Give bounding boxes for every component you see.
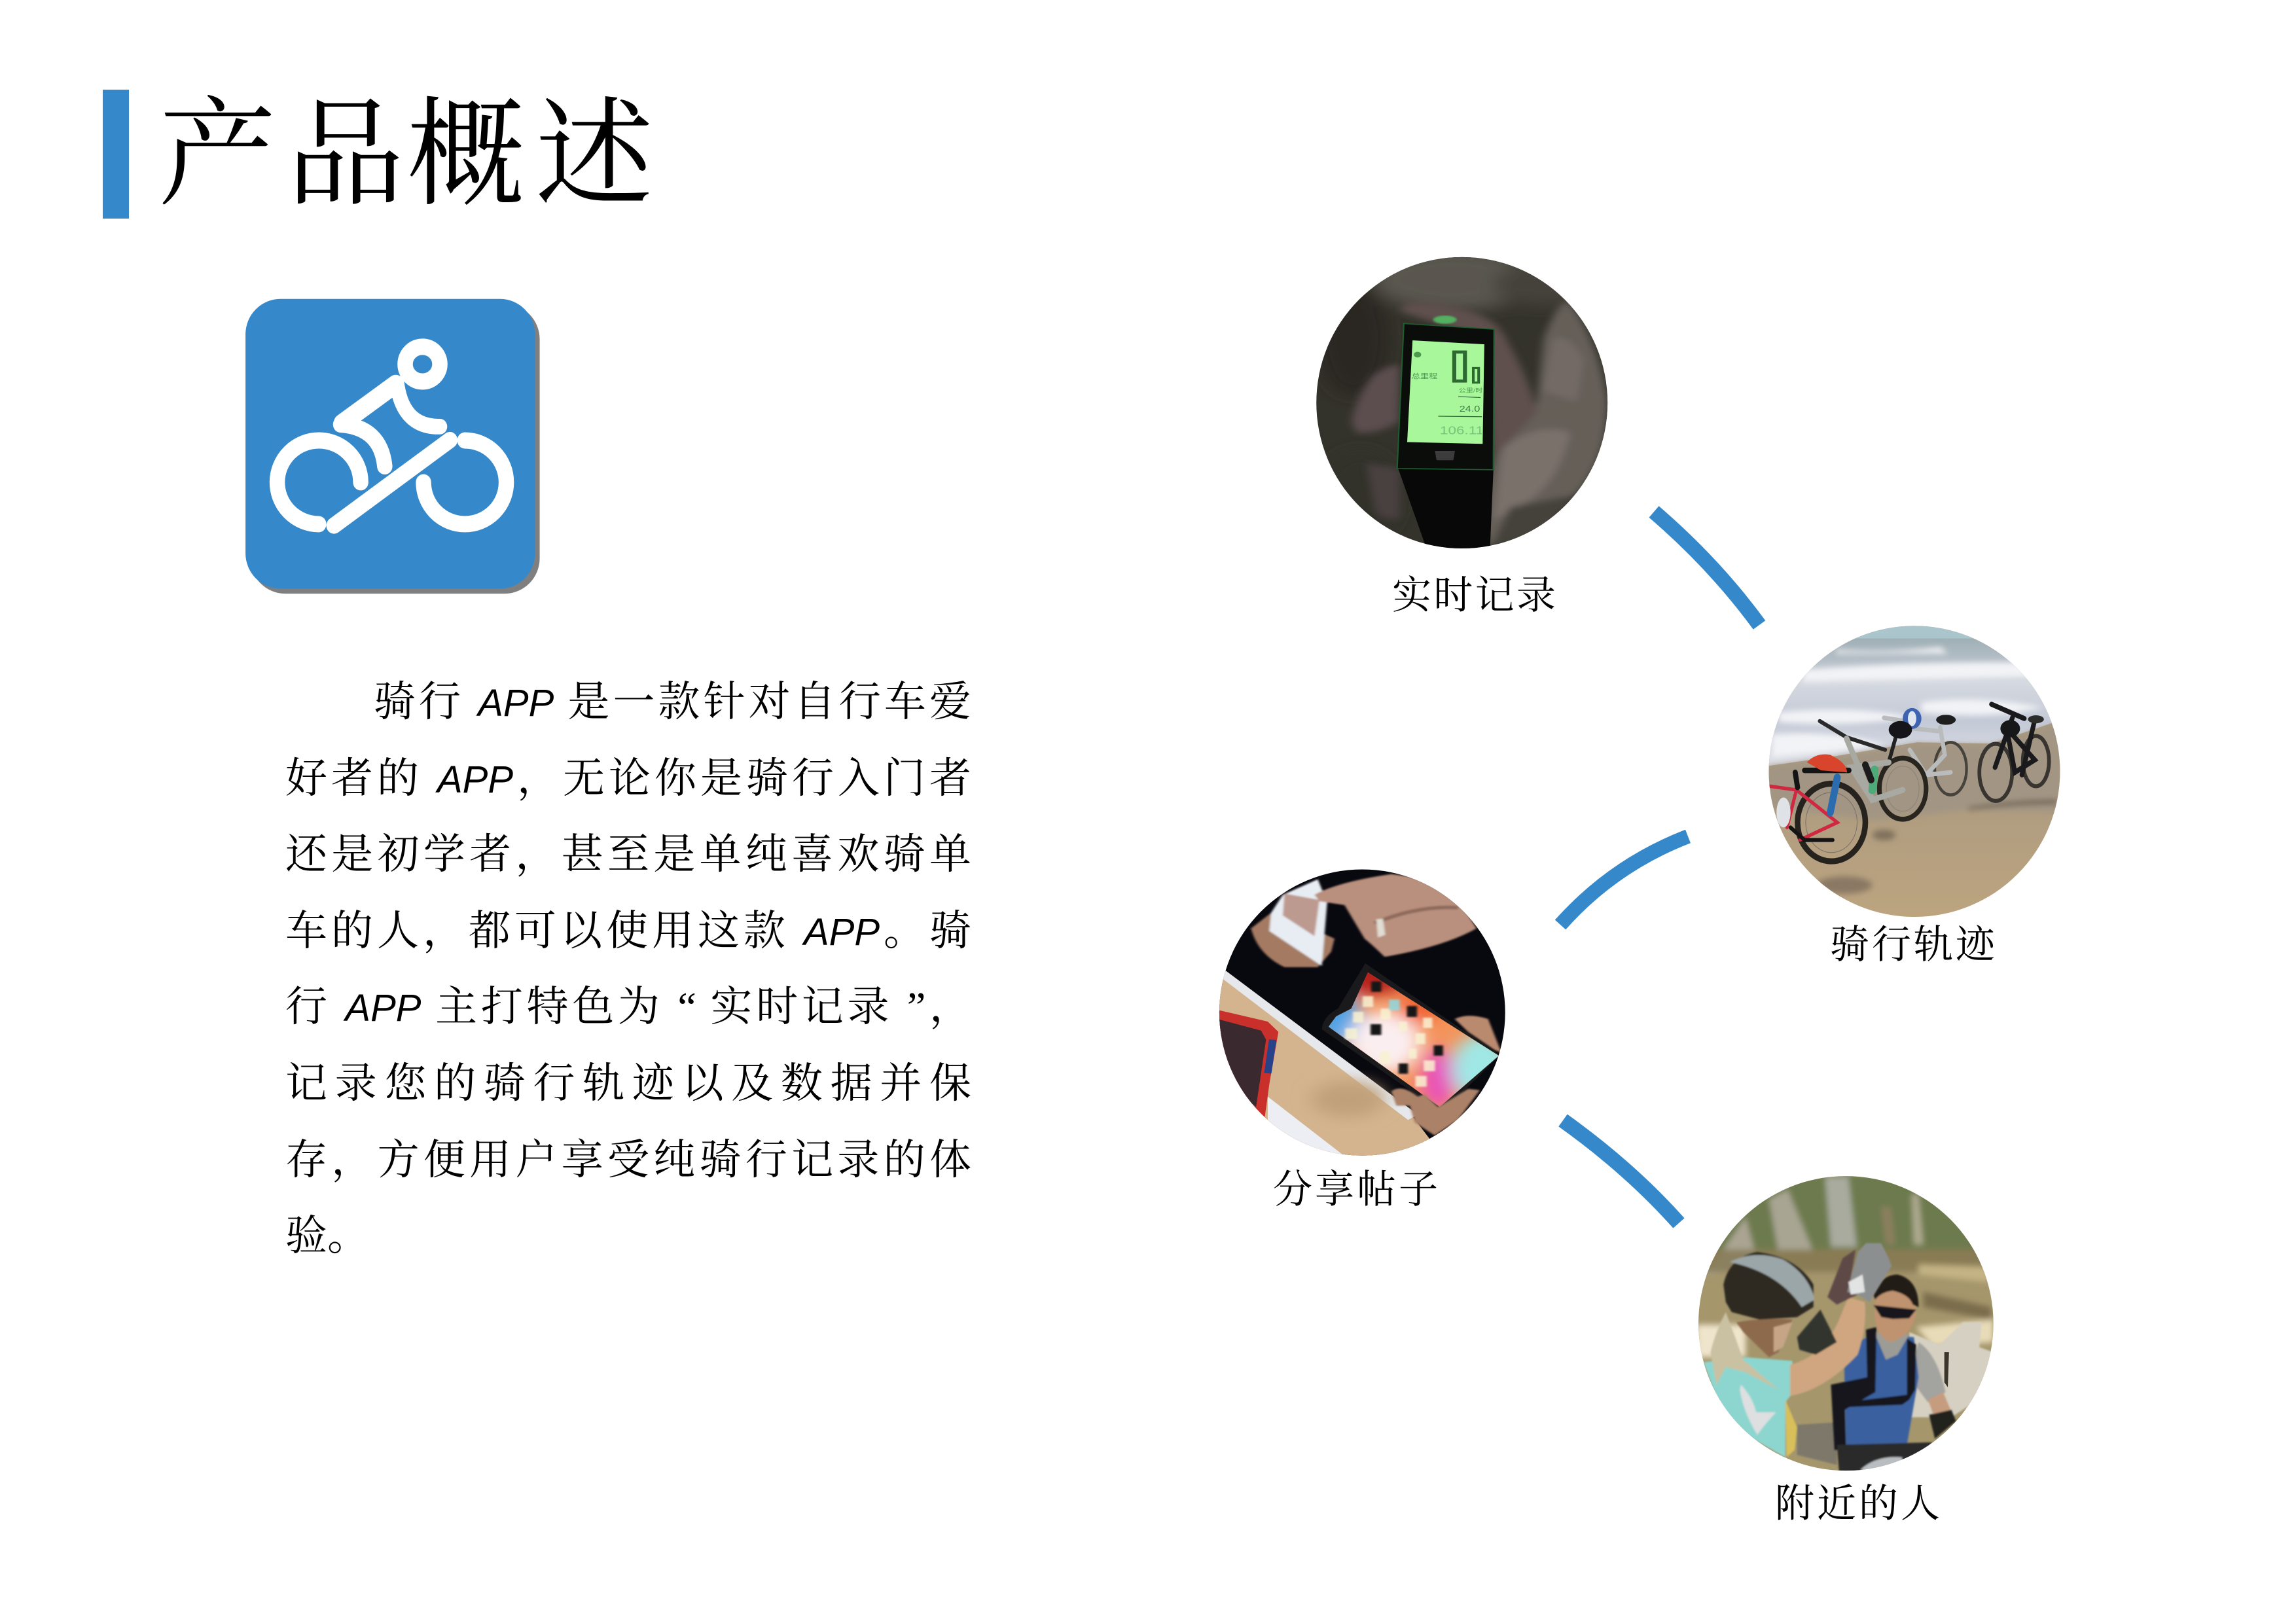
red phone xyxy=(1217,1010,1278,1120)
body paragraph: 好者的 APP，无论你是骑行入门者 xyxy=(285,755,971,802)
photo: cycling computer held in hand: 106.11 xyxy=(1440,425,1484,437)
icon: app logo cyclist xyxy=(245,299,540,594)
bicycles xyxy=(1770,704,2049,861)
device body xyxy=(1398,469,1494,548)
photo: bikes on the beach xyxy=(1767,624,2062,918)
photo: cycling computer held in hand: 公里/时 xyxy=(1459,387,1482,394)
caption: ride track: 骑行轨迹 xyxy=(1830,923,1996,967)
hands on main phone xyxy=(1391,1016,1501,1135)
photo: cycling computer held in hand xyxy=(1310,249,1617,554)
device screen xyxy=(1407,340,1484,444)
body paragraph: 验。 xyxy=(285,1213,369,1259)
photo: cycling computer held in hand: 24.0 xyxy=(1460,404,1480,414)
caption: share posts: 分享帖子 xyxy=(1273,1168,1438,1211)
arrow: curve from ride track to sharing posts xyxy=(1560,836,1688,925)
body paragraph: 骑行 APP 是一款针对自行车爱 xyxy=(374,679,971,725)
man xyxy=(1831,1275,1956,1472)
caption: nearby people: 附近的人 xyxy=(1775,1482,1940,1525)
log xyxy=(1909,1322,1994,1418)
caption: real-time record: 实时记录 xyxy=(1392,574,1556,617)
body paragraph: 车的人，都可以使用这款 APP。骑 xyxy=(285,908,971,954)
body paragraph: 还是初学者，甚至是单纯喜欢骑单 xyxy=(285,831,971,878)
photo: two cyclists high five xyxy=(1696,1174,1996,1472)
glove xyxy=(1827,1249,1858,1304)
body paragraph: 行 APP 主打特色为 “ 实时记录 ”， xyxy=(285,984,971,1030)
photo: hands holding smartphones xyxy=(1217,866,1511,1159)
woman xyxy=(1704,1243,1892,1457)
arrow: curve from sharing posts to nearby people xyxy=(1563,1120,1679,1223)
main phone xyxy=(1322,963,1500,1113)
body paragraph xyxy=(285,679,971,1259)
body paragraph: 存，方便用户享受纯骑行记录的体 xyxy=(285,1137,971,1183)
title: 产品概述 xyxy=(158,90,653,221)
title accent bar xyxy=(103,90,129,219)
body paragraph: 记录您的骑行轨迹以及数据并保 xyxy=(285,1060,971,1107)
photo: cycling computer held in hand: 总里程 xyxy=(1412,372,1438,380)
upper hand with phone xyxy=(1251,874,1477,967)
arrow: curve from real-time record to ride track xyxy=(1654,512,1759,625)
